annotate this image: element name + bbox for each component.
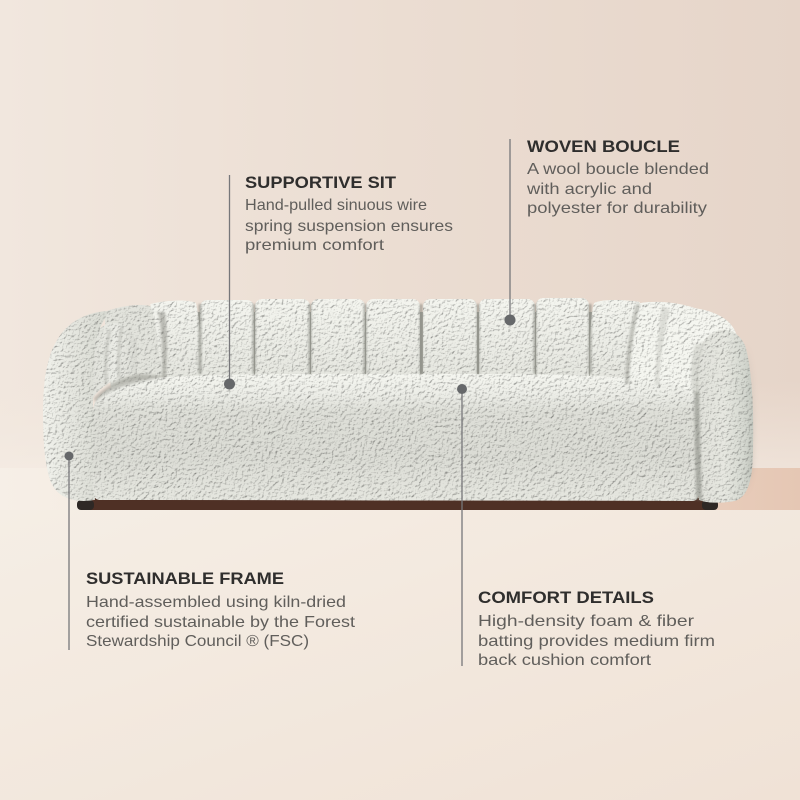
body text: polyester for durability <box>527 200 707 217</box>
body text: Hand-assembled using kiln-dried <box>86 594 346 611</box>
callout: supportive sit <box>224 174 453 390</box>
heading: SUPPORTIVE SIT <box>245 174 396 192</box>
heading: WOVEN BOUCLE <box>527 138 680 156</box>
left arm inner rolls <box>90 323 137 400</box>
sofa shadow <box>90 498 710 510</box>
left arm inner roll shading <box>106 326 122 385</box>
heading: SUSTAINABLE FRAME <box>86 570 284 588</box>
back shadow base <box>150 312 650 382</box>
back channel seams <box>200 304 590 374</box>
right arm rear rolls <box>628 302 738 400</box>
body text: A wool boucle blended <box>527 161 709 178</box>
callout: sustainable frame <box>64 452 356 650</box>
back channels <box>104 298 640 400</box>
body text: Stewardship Council ® (FSC) <box>86 633 309 650</box>
body text: certified sustainable by the Forest <box>86 614 356 631</box>
upholstery shading <box>94 304 753 500</box>
body text: spring suspension ensures <box>245 218 453 235</box>
body text: premium comfort <box>245 237 385 254</box>
leader line and dot <box>504 139 516 326</box>
sofa photo illustration <box>43 298 753 510</box>
right arm <box>696 330 753 503</box>
body text: with acrylic and <box>526 181 652 198</box>
callout: comfort details <box>457 384 715 669</box>
seat and front cushion <box>93 374 699 501</box>
sofa feet <box>77 500 718 510</box>
callout: woven boucle <box>504 138 709 326</box>
body text: batting provides medium firm <box>478 633 715 650</box>
sofa upholstery <box>43 298 753 503</box>
body text: Hand-pulled sinuous wire <box>245 197 427 214</box>
leader line and dot <box>64 452 74 650</box>
leader line and dot <box>457 384 467 666</box>
body text: back cushion comfort <box>478 652 652 669</box>
left arm <box>43 311 107 501</box>
heading: COMFORT DETAILS <box>478 589 654 607</box>
leader line and dot <box>224 175 235 390</box>
body text: High-density foam & fiber <box>478 613 695 630</box>
